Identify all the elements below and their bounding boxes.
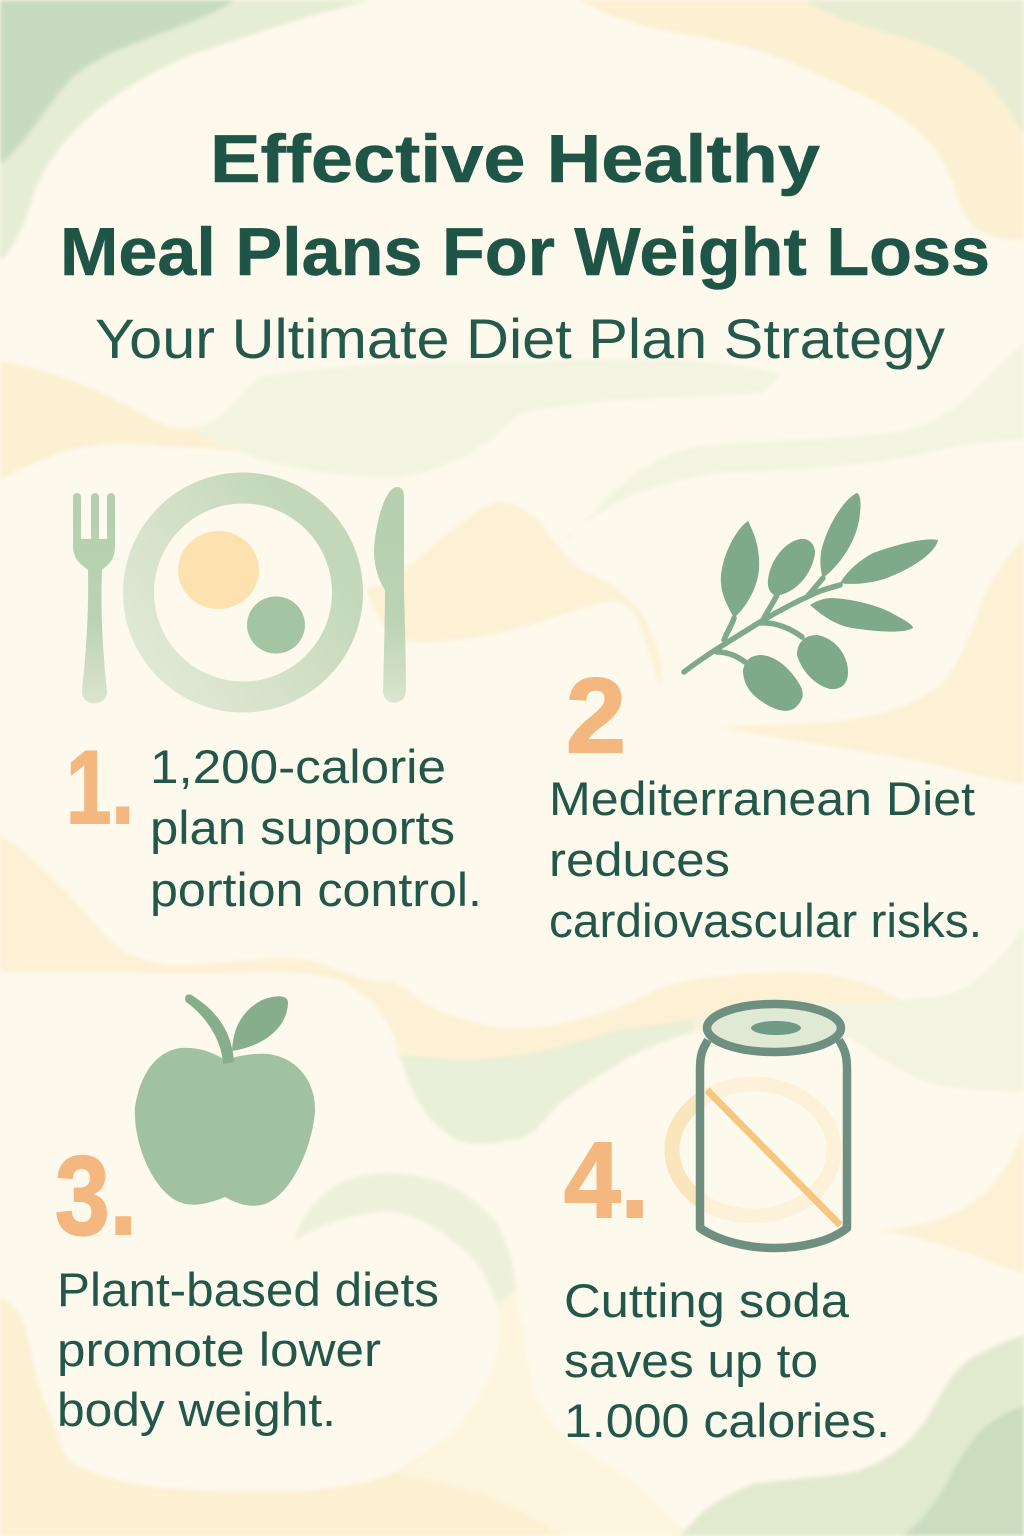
- title: Meal Plans For Weight Loss: [60, 214, 990, 290]
- leaves: [721, 521, 759, 618]
- text block 1: [150, 740, 482, 916]
- number 3: 3.: [55, 1133, 137, 1258]
- text block 3: body weight.: [57, 1383, 336, 1436]
- title: [60, 121, 990, 290]
- subtitle: Your Ultimate Diet Plan Strategy: [95, 307, 945, 370]
- number 2: 2: [566, 657, 626, 775]
- icon: olive branch: [684, 493, 938, 711]
- text block 2: reduces: [549, 833, 730, 886]
- plate: [138, 488, 348, 697]
- text block 1: 1,200-calorie: [150, 740, 446, 793]
- can body: [700, 1040, 847, 1248]
- text block 2: [549, 772, 982, 947]
- green food: [247, 596, 305, 654]
- text block 4: [564, 1274, 890, 1447]
- text block 3: Plant-based diets: [57, 1263, 439, 1316]
- title: Effective Healthy: [210, 121, 820, 197]
- icon: apple: [135, 994, 315, 1206]
- text block 1: portion control.: [150, 863, 482, 916]
- fork: [73, 493, 115, 703]
- knife: [374, 487, 406, 703]
- icon: plate with cutlery: [73, 487, 406, 703]
- no-symbol ring: [672, 1084, 834, 1216]
- olives: [797, 635, 848, 689]
- text block 3: [57, 1263, 439, 1436]
- text block 4: 1.000 calories.: [564, 1394, 890, 1447]
- number 1: 1.: [66, 730, 134, 846]
- stems: [684, 578, 840, 672]
- strike line: [707, 1090, 840, 1225]
- text block 2: Mediterranean Diet: [549, 772, 975, 825]
- text block 2: cardiovascular risks.: [549, 894, 982, 947]
- yellow food: [178, 531, 259, 609]
- icon: soda can crossed out: [672, 1004, 847, 1248]
- text block 3: promote lower: [57, 1323, 381, 1376]
- text block 4: Cutting soda: [564, 1274, 850, 1327]
- can lid: [707, 1004, 841, 1052]
- text block 4: saves up to: [564, 1334, 818, 1387]
- number 4: 4.: [564, 1119, 649, 1240]
- text block 1: plan supports: [150, 801, 455, 854]
